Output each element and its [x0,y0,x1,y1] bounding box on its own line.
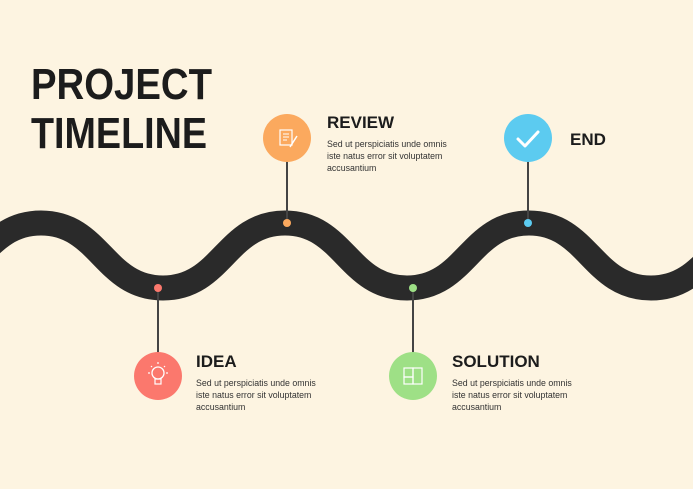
text: review: Sed ut perspiciatis unde omnis [327,139,447,149]
text: end: END [570,130,606,149]
text: review: accusantium [327,163,376,173]
milestone dots [154,219,532,292]
text: solution [452,352,572,412]
icon: review [263,114,311,162]
text: idea: Sed ut perspiciatis unde omnis [196,378,316,388]
text: review [327,113,447,173]
text: review: iste natus error sit voluptatem [327,151,442,161]
text: solution: SOLUTION [452,352,540,371]
text: idea: IDEA [196,352,237,371]
text: solution: accusantium [452,402,501,412]
connector lines [158,160,528,354]
icon: idea bulb [134,352,182,400]
icon: solution puzzle [389,352,437,400]
icon: end check [504,114,552,162]
text: idea: iste natus error sit voluptatem [196,390,311,400]
wavy road [0,223,693,288]
text: solution: Sed ut perspiciatis unde omnis [452,378,572,388]
title: PROJECT [31,60,212,109]
title [31,60,212,158]
text: idea: accusantium [196,402,245,412]
text: solution: iste natus error sit voluptatem [452,390,567,400]
title: TIMELINE [31,109,207,158]
text: idea [196,352,316,412]
text: review: REVIEW [327,113,395,132]
